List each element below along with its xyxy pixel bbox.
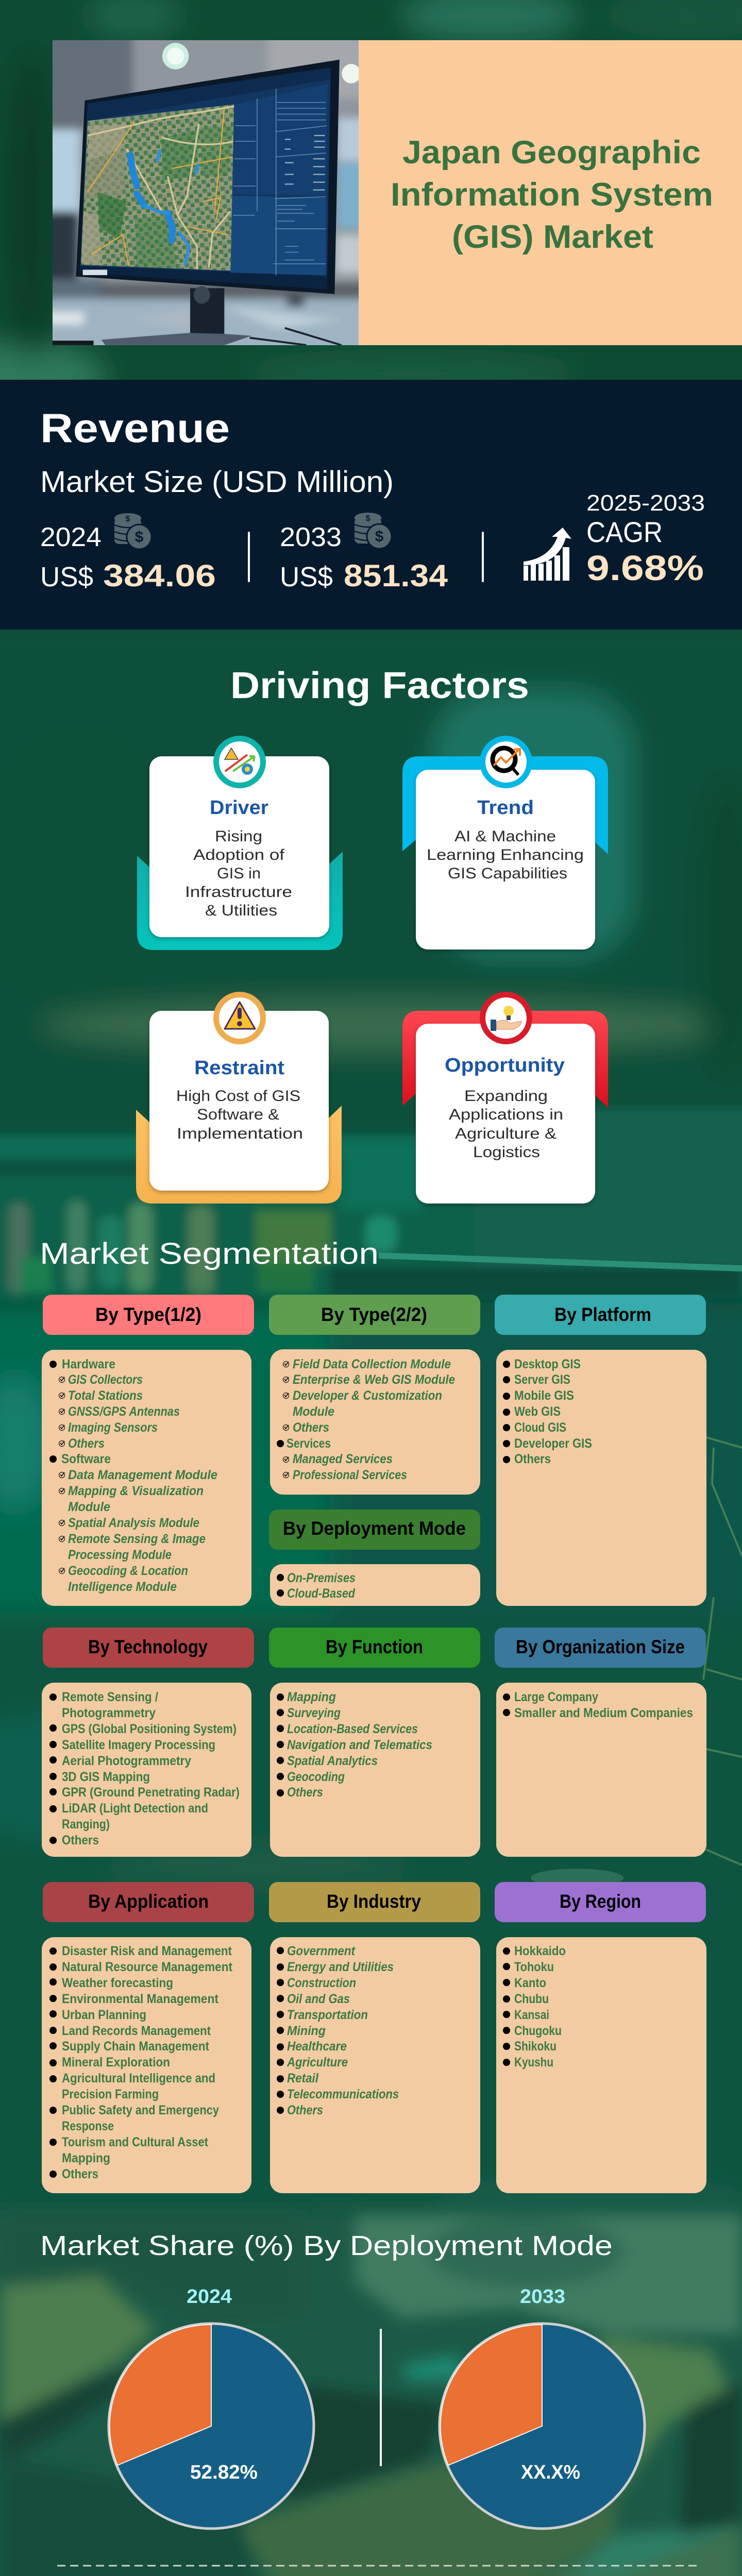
legend: deployment mode	[57, 2566, 701, 2576]
list: Others	[287, 2103, 323, 2117]
chart: deployment mode 2033: 2033	[520, 2286, 565, 2308]
list: Processing Module	[68, 1548, 172, 1562]
icon: coins 2033: $	[366, 514, 370, 523]
stat: 2033	[280, 522, 448, 593]
icon: coins 2033	[355, 513, 392, 549]
list: Mapping	[287, 1690, 336, 1704]
list: Server GIS	[514, 1372, 570, 1387]
list: Mineral Exploration	[62, 2055, 170, 2070]
stat: 2024	[40, 522, 216, 593]
text: opportunity	[449, 1088, 563, 1161]
text: opportunity: Applications in	[449, 1106, 563, 1123]
card: trend	[402, 736, 608, 950]
icon: coins 2033: $	[375, 528, 384, 545]
stat: 2033: 851.34	[344, 558, 448, 593]
panel: by region	[495, 1882, 706, 2193]
stat: 2024: 384.06	[103, 558, 216, 593]
list: Hokkaido	[514, 1944, 566, 1958]
list	[503, 1944, 566, 2070]
list: Mapping	[62, 2151, 110, 2165]
list: Chugoku	[514, 2024, 562, 2038]
list: Healthcare	[287, 2039, 347, 2054]
list: Environmental Management	[62, 1992, 219, 2006]
header	[495, 1882, 706, 1922]
list: Mobile GIS	[514, 1388, 574, 1403]
list: Desktop GIS	[514, 1357, 581, 1371]
list: Others	[514, 1452, 551, 1466]
list: Weather forecasting	[62, 1976, 173, 1990]
list: Mining	[287, 2024, 326, 2038]
text: restraint: Software &	[197, 1106, 279, 1123]
list: Geocoding & Location	[68, 1564, 188, 1578]
icon: opportunity	[480, 992, 532, 1044]
list: Geocoding	[287, 1770, 345, 1784]
title	[391, 134, 713, 255]
list: Ranging)	[62, 1817, 110, 1832]
list: Construction	[287, 1976, 356, 1990]
list: Kansai	[514, 2008, 549, 2022]
text: restraint: Implementation	[177, 1125, 303, 1142]
stat: CAGR	[586, 490, 705, 588]
panel: by organization size	[495, 1628, 706, 1857]
list: Professional Services	[293, 1468, 407, 1482]
heading: restraint: Restraint	[194, 1057, 284, 1079]
list	[277, 1357, 455, 1482]
panel: by platform	[495, 1295, 706, 1606]
panel: by function	[269, 1628, 480, 1857]
list: Navigation and Telematics	[287, 1738, 432, 1752]
icon: driver	[213, 736, 266, 788]
list: Data Management Module	[68, 1468, 217, 1482]
header	[43, 1628, 254, 1668]
list: Total Stations	[68, 1388, 143, 1403]
list: Others	[293, 1420, 329, 1435]
heading: opportunity: Opportunity	[445, 1055, 565, 1076]
card: restraint	[136, 992, 342, 1204]
list: Module	[293, 1404, 334, 1419]
subheading: market size: Market Size (USD Million)	[40, 465, 394, 499]
chart: deployment mode 2024: 2024	[187, 2286, 232, 2308]
list: Web GIS	[514, 1404, 561, 1419]
list: Others	[68, 1436, 105, 1451]
list: Enterprise & Web GIS Module	[293, 1372, 455, 1387]
chart: deployment mode 2033: XX.X%	[521, 2462, 580, 2483]
list: Remote Sensing & Image	[68, 1532, 206, 1546]
list: Software	[61, 1452, 111, 1466]
list: Remote Sensing /	[62, 1690, 158, 1704]
header: By Type(2/2)	[321, 1304, 427, 1325]
list	[503, 1690, 693, 1720]
stat: 2024: 2024	[40, 522, 102, 552]
list: Oil and Gas	[287, 1992, 350, 2006]
stat: CAGR: 2025-2033	[586, 490, 705, 516]
text: trend: Learning Enhancing	[427, 846, 584, 863]
list: GNSS/GPS Antennas	[68, 1404, 180, 1419]
list: Location-Based Services	[287, 1722, 418, 1736]
heading: market segmentation: Market Segmentation	[40, 1237, 379, 1270]
title: (GIS) Market	[452, 219, 653, 255]
header: By Deployment Mode	[283, 1518, 466, 1539]
text: trend	[427, 828, 584, 882]
heading: trend: Trend	[477, 797, 534, 819]
card: driver	[137, 736, 343, 950]
list: Intelligence Module	[68, 1580, 177, 1594]
list: LiDAR (Light Detection and	[62, 1801, 208, 1816]
list: Cloud GIS	[514, 1420, 566, 1435]
list	[277, 1571, 356, 1601]
text: trend: AI & Machine	[454, 828, 556, 845]
list: Natural Resource Management	[62, 1960, 233, 1974]
list: GPR (Ground Penetrating Radar)	[62, 1785, 240, 1800]
list	[503, 1357, 592, 1466]
list: Module	[68, 1500, 110, 1514]
list: Shikoku	[514, 2039, 556, 2054]
text: restraint: High Cost of GIS	[176, 1088, 300, 1105]
header	[495, 1628, 706, 1668]
list: Cloud-Based	[287, 1586, 356, 1601]
header: By Industry	[327, 1891, 421, 1912]
list: Developer GIS	[514, 1436, 592, 1451]
header	[269, 1295, 480, 1335]
header: By Application	[88, 1891, 209, 1912]
header	[43, 1882, 254, 1922]
list: Land Records Management	[62, 2024, 211, 2038]
list: Others	[62, 1833, 99, 1848]
text: driver: & Utilities	[205, 902, 277, 919]
list: Transportation	[287, 2008, 368, 2022]
icon: coins 2024	[114, 513, 151, 549]
list: Disaster Risk and Management	[62, 1944, 232, 1958]
list: Government	[287, 1944, 356, 1958]
heading: driving factors: Driving Factors	[230, 665, 529, 706]
list: Others	[62, 2167, 98, 2181]
list: Agriculture	[286, 2055, 348, 2070]
list: On-Premises	[287, 1571, 356, 1585]
chart: deployment mode 2024: 52.82%	[190, 2462, 258, 2483]
heading: market share by deployment mode: Market Share (%) By Deployment Mode	[40, 2230, 613, 2261]
list: Imaging Sensors	[68, 1420, 158, 1435]
list: 3D GIS Mapping	[62, 1770, 150, 1784]
list: Smaller and Medium Companies	[514, 1706, 693, 1720]
icon: restraint	[213, 992, 266, 1044]
list: Hardware	[62, 1357, 115, 1371]
text: driver: Rising	[215, 828, 262, 845]
chart: deployment mode 2033	[440, 2286, 645, 2529]
list: Developer & Customization	[293, 1388, 442, 1403]
header: By Region	[560, 1891, 641, 1912]
stat: 2024: US$	[40, 562, 93, 592]
list: Surveying	[287, 1706, 341, 1720]
list: Kyushu	[514, 2055, 553, 2070]
list: Services	[286, 1436, 331, 1451]
list: Field Data Collection Module	[293, 1357, 451, 1371]
list	[49, 1690, 240, 1848]
text: trend: GIS Capabilities	[448, 865, 567, 882]
header	[269, 1882, 480, 1922]
list	[49, 1944, 233, 2181]
list: Aerial Photogrammetry	[62, 1754, 191, 1768]
header	[269, 1628, 480, 1668]
list	[277, 1690, 432, 1800]
header	[495, 1295, 706, 1335]
stat: 2033: 2033	[280, 522, 342, 552]
list: Retail	[287, 2071, 319, 2086]
icon: coins 2024: $	[135, 529, 144, 546]
list: Tohoku	[514, 1960, 554, 1974]
text: driver: Adoption of	[193, 846, 285, 863]
list: Satellite Imagery Processing	[62, 1738, 215, 1752]
text: driver: GIS in	[217, 865, 261, 882]
list: Managed Services	[293, 1452, 393, 1466]
chart: deployment mode 2024	[109, 2286, 314, 2529]
text: opportunity: Agriculture &	[455, 1125, 556, 1142]
panel: by deployment mode	[269, 1510, 480, 1606]
card: opportunity	[402, 992, 608, 1204]
panel: by type 2/2	[269, 1295, 480, 1495]
list: Others	[287, 1785, 323, 1800]
list: Spatial Analytics	[287, 1754, 378, 1768]
icon: trend	[480, 736, 532, 788]
list: Urban Planning	[62, 2008, 146, 2022]
list: Public Safety and Emergency	[62, 2103, 219, 2117]
list: Supply Chain Management	[62, 2039, 210, 2054]
list: Kanto	[514, 1976, 546, 1990]
hero photo: monitor showing GIS map	[53, 40, 359, 345]
list: GPS (Global Positioning System)	[62, 1722, 237, 1736]
heading: driver: Driver	[210, 797, 268, 819]
list: Response	[62, 2119, 114, 2133]
header	[269, 1510, 480, 1550]
icon: growth chart	[524, 528, 571, 581]
header: By Function	[326, 1636, 423, 1657]
list: Precision Farming	[62, 2087, 159, 2102]
panel: by industry	[269, 1882, 480, 2193]
icon: coins 2024: $	[126, 515, 130, 523]
list: Tourism and Cultural Asset	[62, 2135, 209, 2149]
list: Agricultural Intelligence and	[62, 2071, 215, 2086]
list: Large Company	[514, 1690, 598, 1704]
list	[277, 1944, 399, 2117]
title: Information System	[391, 177, 713, 213]
title: Japan Geographic	[402, 134, 701, 171]
list: Photogrammetry	[62, 1706, 156, 1720]
panel: by type 1/2	[42, 1295, 254, 1606]
text: opportunity: Expanding	[464, 1088, 548, 1105]
title panel	[359, 40, 742, 345]
list: Chubu	[514, 1992, 549, 2006]
text: restraint	[176, 1088, 303, 1142]
panel: by technology	[42, 1628, 254, 1857]
heading: revenue: Revenue	[40, 405, 230, 451]
list: Mapping & Visualization	[68, 1484, 204, 1498]
header: By Technology	[88, 1636, 208, 1657]
list: Energy and Utilities	[287, 1960, 394, 1974]
text: opportunity: Logistics	[473, 1144, 540, 1161]
list	[49, 1357, 217, 1594]
header	[43, 1295, 254, 1335]
header: By Platform	[554, 1304, 651, 1325]
stat: CAGR: CAGR	[586, 516, 663, 548]
header: By Organization Size	[516, 1636, 685, 1657]
stat: CAGR: 9.68%	[586, 548, 704, 588]
list: Spatial Analysis Module	[68, 1516, 199, 1530]
text: driver: Infrastructure	[185, 884, 292, 901]
list: Telecommunications	[287, 2087, 399, 2102]
panel: revenue	[0, 380, 742, 630]
stat: 2033: US$	[280, 562, 333, 592]
text: driver	[185, 828, 292, 919]
panel: by application	[42, 1882, 254, 2193]
list: GIS Collectors	[68, 1372, 143, 1387]
header: By Type(1/2)	[95, 1304, 201, 1325]
